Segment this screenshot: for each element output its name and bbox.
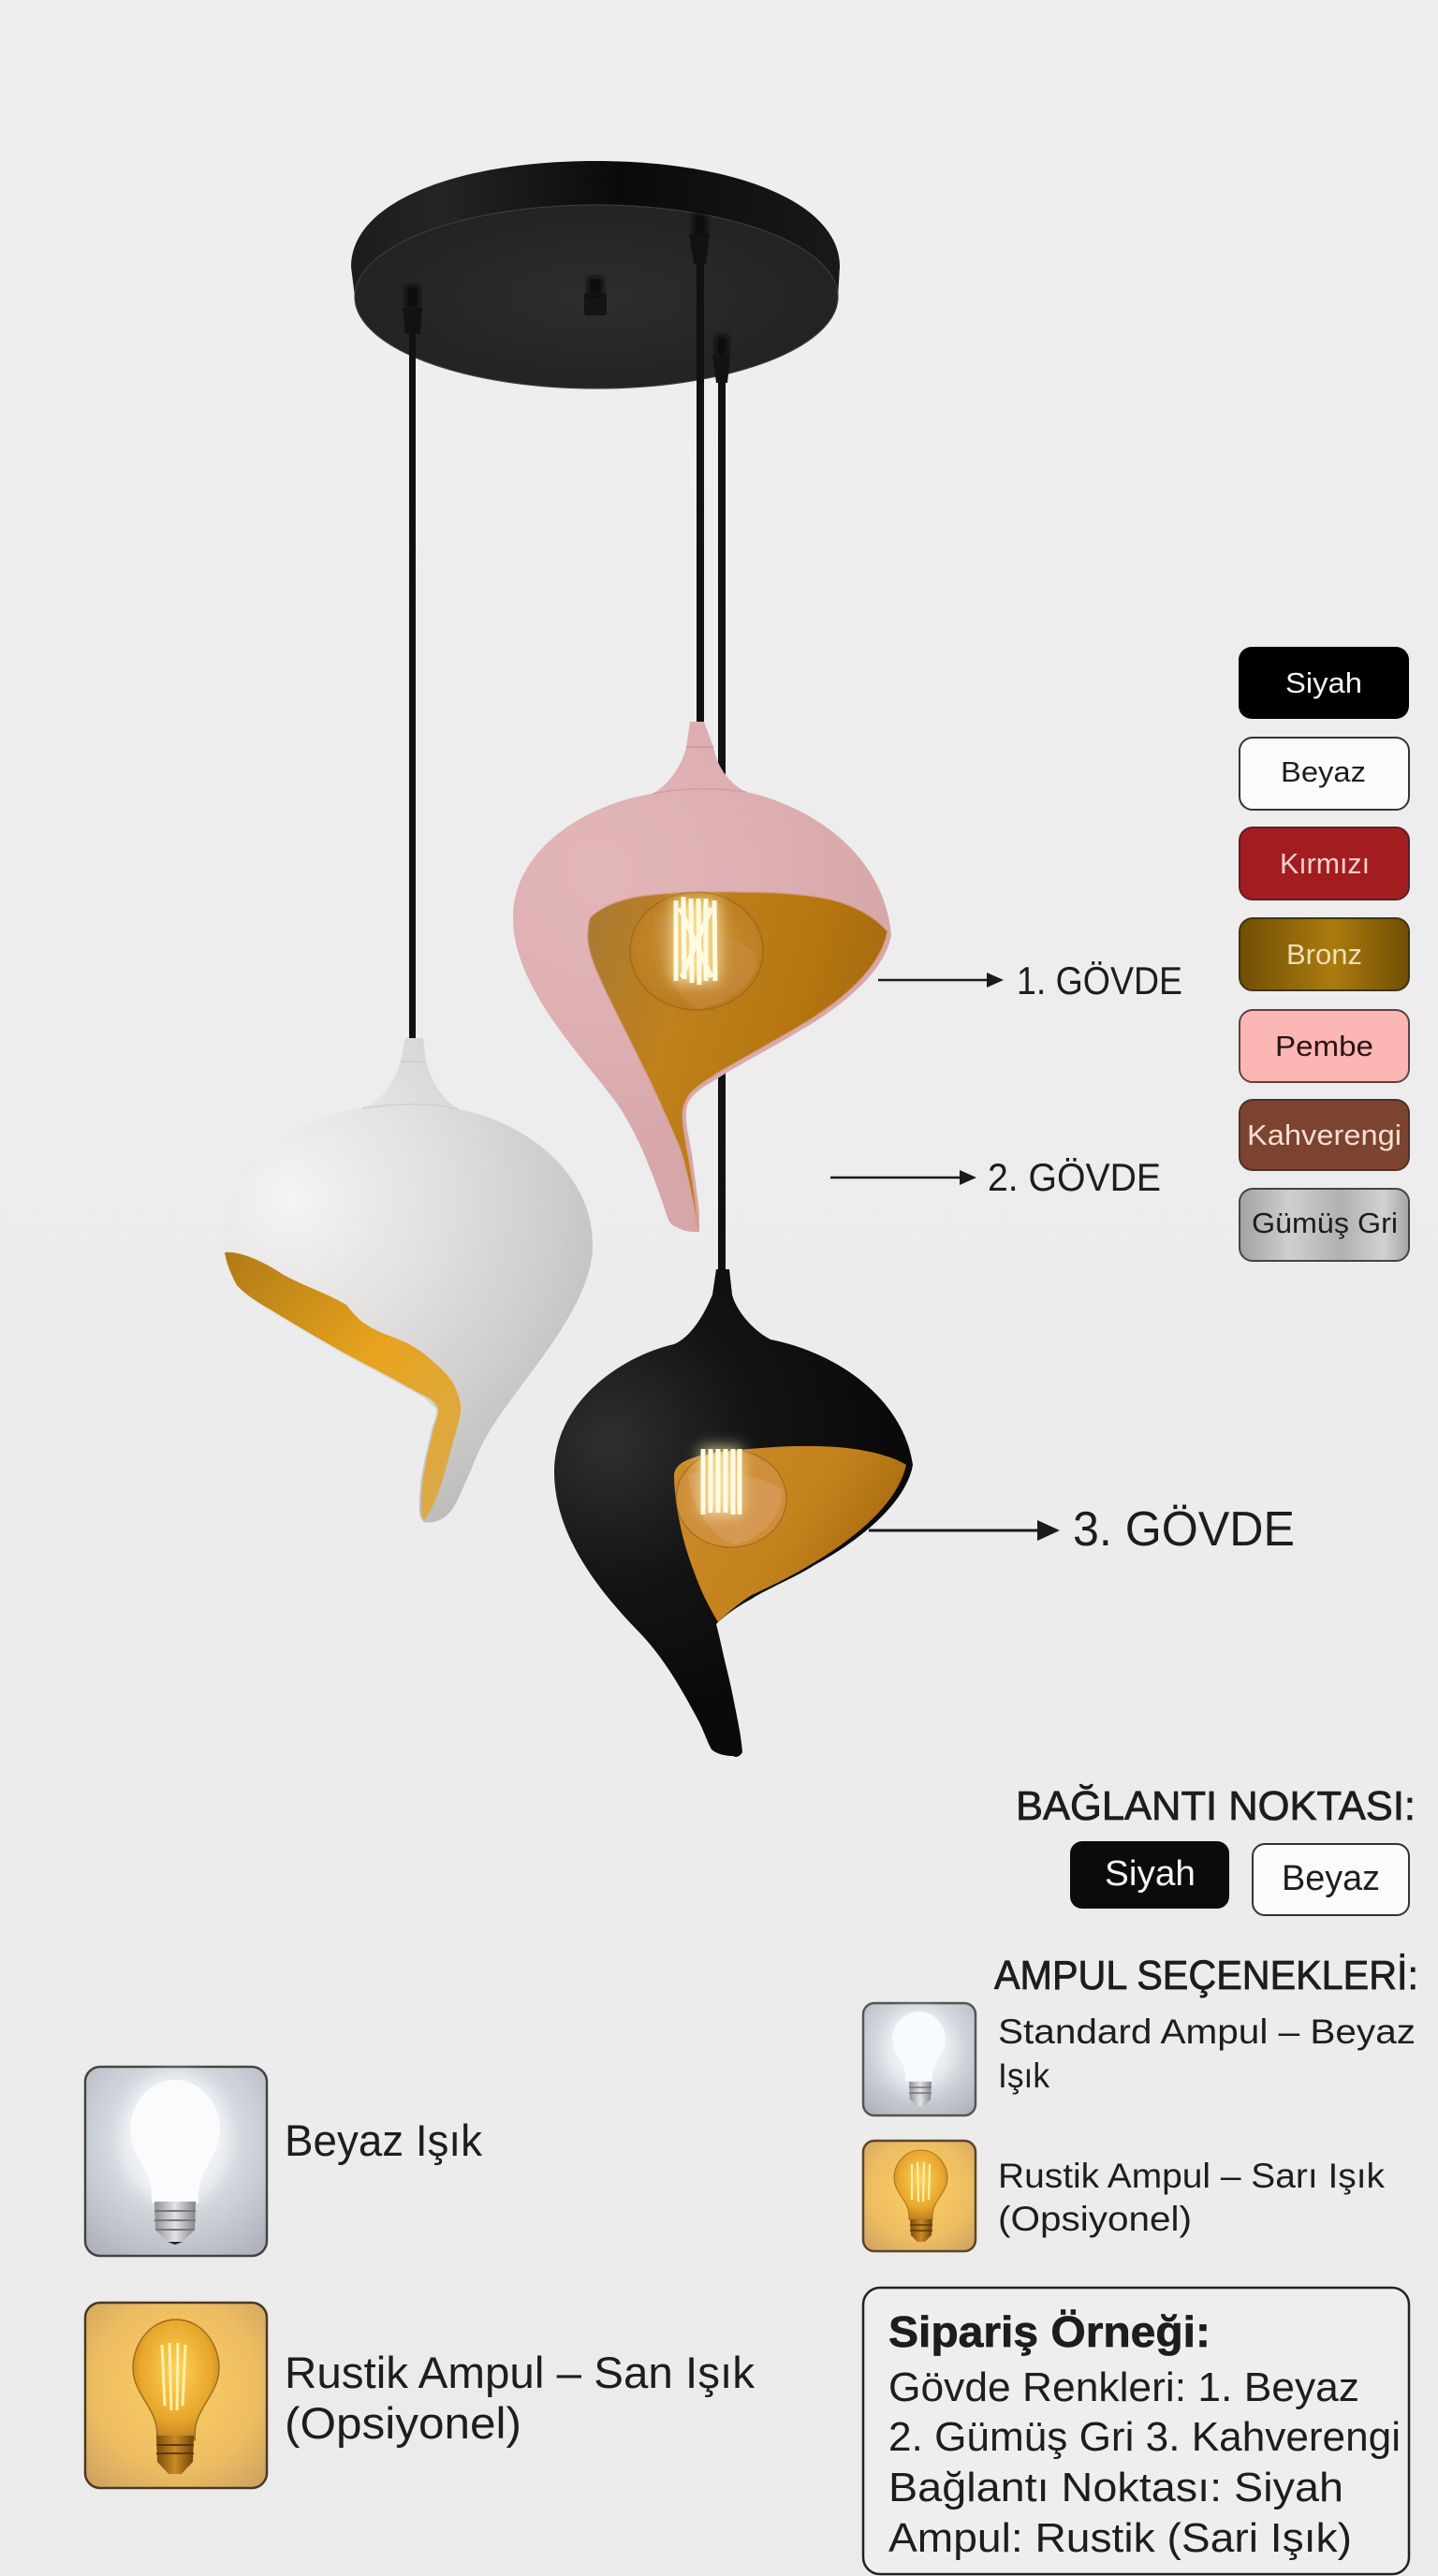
arrow: 3. GÖVDE: 3. GÖVDE bbox=[1073, 1502, 1295, 1557]
colour swatch: Gümüş Gri bbox=[1240, 1189, 1409, 1261]
order title: Sipariş Örneği: bbox=[888, 2307, 1211, 2356]
order details bbox=[888, 2364, 1401, 2561]
label: rustic bulb large: Rustik Ampul – San Işık bbox=[285, 2348, 756, 2397]
arrow: 2. GÖVDE bbox=[830, 1155, 1161, 1199]
order details: 2. Gümüş Gri 3. Kahverengi bbox=[888, 2414, 1401, 2460]
gold interior bbox=[225, 1252, 461, 1520]
light bulb bbox=[630, 892, 763, 1010]
colour swatch: Kırmızı bbox=[1240, 827, 1409, 900]
text: rustic bulb option: (Opsiyonel) bbox=[998, 2200, 1192, 2238]
arrow: 3. GÖVDE bbox=[869, 1502, 1295, 1557]
connection option: Beyaz: Beyaz bbox=[1282, 1859, 1380, 1898]
connection option: Siyah: Siyah bbox=[1105, 1854, 1196, 1894]
label: Beyaz Işık: Beyaz Işık bbox=[285, 2115, 482, 2165]
colour swatch: Pembe: Pembe bbox=[1275, 1030, 1373, 1062]
colour swatch: Beyaz bbox=[1240, 738, 1409, 810]
label: rustic bulb large: (Opsiyonel) bbox=[285, 2398, 521, 2448]
filament glow bbox=[700, 1447, 741, 1515]
icon: standard white bulb thumbnail bbox=[863, 2003, 976, 2115]
light bulb bbox=[676, 1450, 786, 1547]
heading: BAĞLANTI NOKTASI: BAĞLANTI NOKTASI: bbox=[1016, 1783, 1416, 1829]
order details: Gövde Renkleri: 1. Beyaz bbox=[888, 2364, 1359, 2410]
connection option: Siyah bbox=[1070, 1841, 1229, 1909]
icon: rustic yellow bulb thumbnail bbox=[863, 2141, 976, 2251]
text: standard bulb option: Işık bbox=[998, 2056, 1049, 2095]
colour swatch: Beyaz: Beyaz bbox=[1281, 755, 1366, 788]
pendant cables and sockets bbox=[403, 234, 730, 1278]
ceiling canopy plate bbox=[351, 161, 840, 388]
text: standard bulb option bbox=[998, 2012, 1416, 2095]
colour swatch: Siyah bbox=[1239, 647, 1409, 719]
colour swatch: Bronz: Bronz bbox=[1286, 938, 1362, 971]
gold interior bbox=[588, 892, 888, 1228]
order details: Ampul: Rustik (Sari Işık) bbox=[888, 2515, 1352, 2561]
colour swatch: Kahverengi: Kahverengi bbox=[1247, 1119, 1401, 1151]
connection option: Beyaz bbox=[1253, 1844, 1409, 1915]
text: rustic bulb option bbox=[998, 2157, 1386, 2238]
colour swatch: Kırmızı: Kırmızı bbox=[1280, 847, 1370, 880]
black pendant lamp bbox=[554, 1269, 913, 1757]
icon: rustic bulb large thumbnail bbox=[85, 2303, 267, 2488]
white pendant lamp bbox=[222, 1038, 593, 1523]
colour swatch: Siyah: Siyah bbox=[1285, 666, 1362, 699]
gold interior bbox=[674, 1446, 906, 1622]
colour swatch: Kahverengi bbox=[1240, 1100, 1409, 1170]
text: standard bulb option: Standard Ampul – Beyaz bbox=[998, 2012, 1416, 2051]
text: rustic bulb option: Rustik Ampul – Sarı Işık bbox=[998, 2157, 1386, 2195]
order details: Bağlantı Noktası: Siyah bbox=[888, 2465, 1343, 2510]
panel: order example bbox=[863, 2288, 1409, 2574]
arrow: 1. GÖVDE bbox=[878, 959, 1182, 1003]
icon: white light bulb large thumbnail bbox=[85, 2067, 267, 2256]
colour swatch: Bronz bbox=[1240, 918, 1409, 990]
arrow: 1. GÖVDE: 1. GÖVDE bbox=[1017, 959, 1182, 1003]
label: rustic bulb large bbox=[285, 2348, 756, 2448]
heading: AMPUL SEÇENEKLERİ: AMPUL SEÇENEKLERİ: bbox=[994, 1953, 1418, 1998]
colour swatch: Gümüş Gri: Gümüş Gri bbox=[1252, 1207, 1398, 1239]
pink pendant lamp bbox=[513, 722, 891, 1232]
colour swatch: Pembe bbox=[1240, 1010, 1409, 1082]
arrow: 2. GÖVDE: 2. GÖVDE bbox=[988, 1155, 1161, 1199]
